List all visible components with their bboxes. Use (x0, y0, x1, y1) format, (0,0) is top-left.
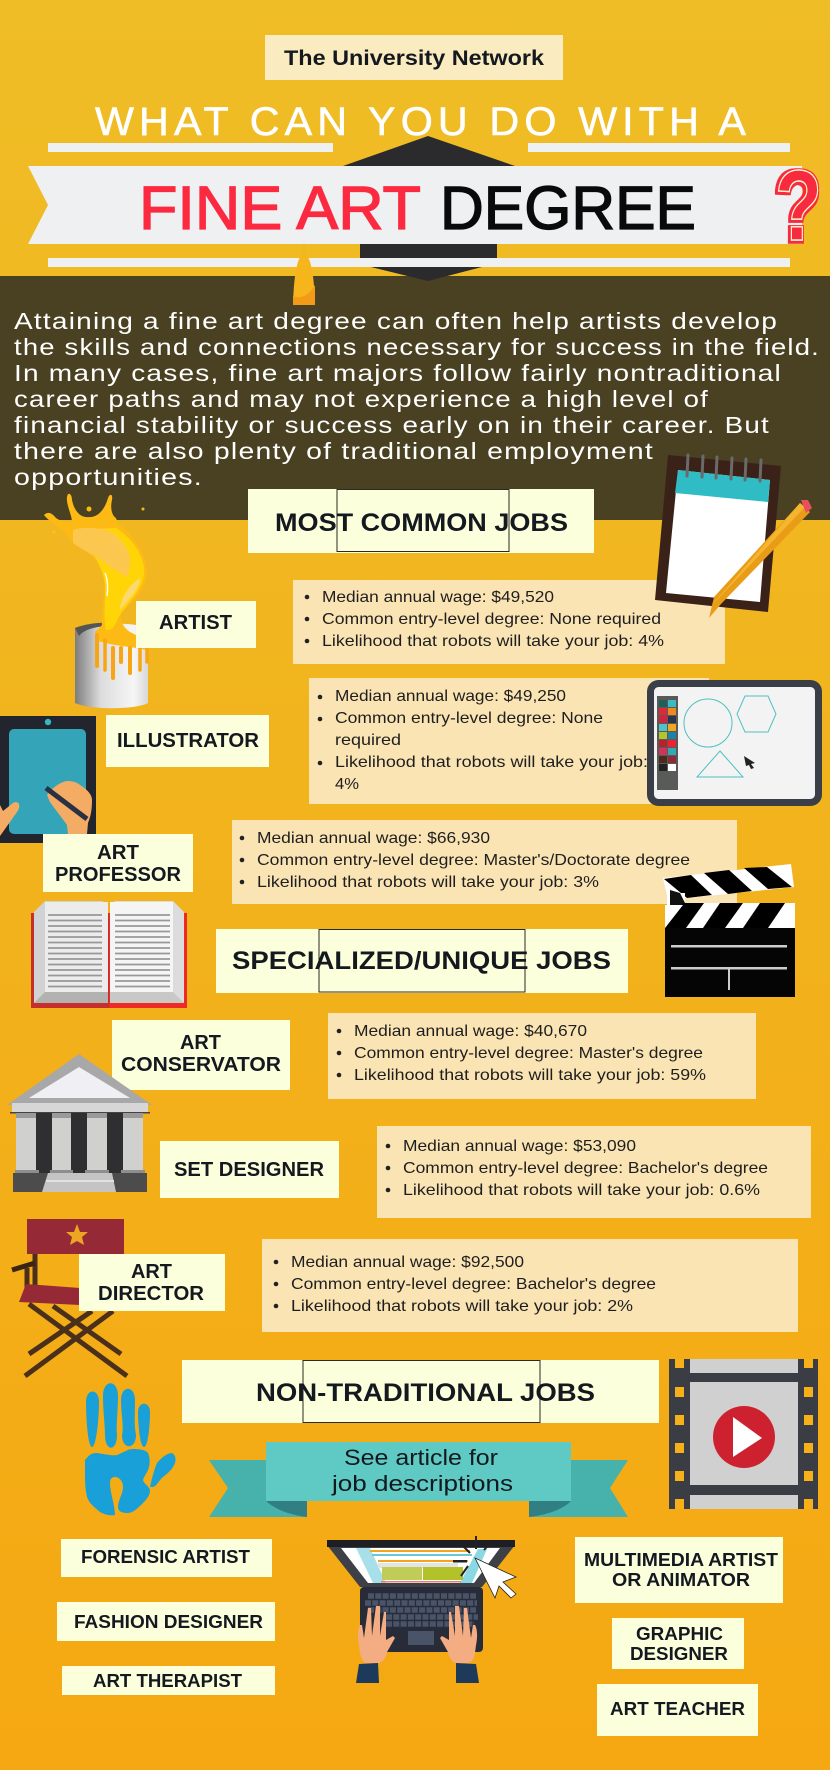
title line one: WHAT CAN YOU DO WITH A (95, 100, 751, 144)
label: multimedia artist or animator (575, 1537, 783, 1603)
label: artist: ARTIST (159, 612, 232, 634)
panel: art professor wages: Median annual wage: $66,930 (257, 830, 490, 847)
panel: illustrator wages: Likelihood that robots will take your job: (335, 754, 648, 771)
icon: whiteboard drawing tablet (650, 684, 818, 802)
icon: director's chair (12, 1219, 127, 1376)
label: set designer: SET DESIGNER (174, 1159, 325, 1181)
label: forensic artist (61, 1539, 272, 1577)
label: multimedia artist or animator: MULTIMEDIA ARTIST (584, 1550, 778, 1570)
label: art director (79, 1254, 225, 1311)
callout: see article ribbon: See article for (344, 1445, 498, 1470)
panel: art conservator wages: Common entry-level degree: Master's degree (354, 1045, 703, 1062)
heading: specialized jobs: SPECIALIZED/UNIQUE JOBS (232, 947, 611, 975)
publisher tag: The University Network (284, 47, 544, 70)
icon: blue hand print (85, 1383, 176, 1515)
panel: set designer wages: Likelihood that robots will take your job: 0.6% (403, 1182, 760, 1199)
label: fashion designer: FASHION DESIGNER (74, 1612, 263, 1632)
intro paragraph: there are also plenty of traditional employment (14, 438, 654, 464)
panel: art director wages (262, 1239, 798, 1332)
title line two: FINE ART (139, 174, 421, 242)
icon: museum building (7, 1054, 152, 1192)
panel: art director wages: Likelihood that robots will take your job: 2% (291, 1298, 633, 1315)
panel: illustrator wages: Common entry-level degree: None (335, 710, 603, 727)
intro paragraph: the skills and connections necessary for success in the field. (14, 334, 820, 360)
label: graphic designer (612, 1618, 744, 1669)
label: illustrator (106, 715, 269, 767)
label: set designer (160, 1141, 339, 1198)
panel: art conservator wages: Likelihood that robots will take your job: 59% (354, 1067, 706, 1084)
callout: see article ribbon: job descriptions (331, 1471, 513, 1496)
label: graphic designer: DESIGNER (630, 1644, 728, 1664)
panel: art director wages: Median annual wage: $92,500 (291, 1254, 524, 1271)
icon: film strip with play button (669, 1359, 818, 1509)
heading: non-traditional jobs: NON-TRADITIONAL JOBS (256, 1379, 595, 1407)
label: illustrator: ILLUSTRATOR (117, 730, 260, 752)
label: artist (136, 601, 256, 648)
icon: film clapperboard (663, 864, 795, 997)
icon: open book (31, 901, 187, 1008)
heading: most common jobs (248, 489, 594, 553)
title line two: DEGREE (440, 174, 696, 242)
panel: art professor wages: Likelihood that robots will take your job: 3% (257, 874, 599, 891)
label: art director: DIRECTOR (98, 1283, 205, 1305)
panel: art conservator wages (328, 1013, 756, 1099)
panel: illustrator wages: 4% (335, 776, 359, 793)
label: forensic artist: FORENSIC ARTIST (81, 1547, 250, 1567)
label: fashion designer (57, 1602, 275, 1641)
label: art conservator (112, 1020, 290, 1090)
label: art teacher: ART TEACHER (610, 1699, 745, 1719)
icon: graduation cap with title banner (28, 136, 802, 305)
label: art conservator: CONSERVATOR (121, 1054, 282, 1076)
label: art professor: PROFESSOR (55, 864, 182, 886)
title line two (139, 174, 696, 242)
panel: artist wages: Median annual wage: $49,520 (322, 589, 554, 606)
heading: specialized jobs (216, 929, 628, 993)
intro paragraph: opportunities. (14, 464, 203, 490)
heading: most common jobs: MOST COMMON JOBS (275, 509, 568, 537)
label: art professor: ART (97, 842, 139, 864)
panel: art director wages: Common entry-level degree: Bachelor's degree (291, 1276, 656, 1293)
publisher tag (265, 35, 563, 80)
panel: illustrator wages (309, 678, 709, 804)
panel: artist wages: Common entry-level degree: None required (322, 611, 661, 628)
panel: art conservator wages: Median annual wage: $40,670 (354, 1023, 587, 1040)
panel: set designer wages: Median annual wage: $53,090 (403, 1138, 636, 1155)
icon: paint can with splash (44, 494, 148, 708)
icon: notepad and pencil (655, 455, 812, 618)
label: art professor (43, 834, 193, 892)
intro paragraph: financial stability or success early on in their career. But (14, 412, 770, 438)
panel: artist wages: Likelihood that robots will take your job: 4% (322, 633, 664, 650)
panel: artist wages (293, 580, 725, 664)
label: graphic designer: GRAPHIC (636, 1624, 723, 1644)
label: art director: ART (131, 1261, 172, 1283)
label: art conservator: ART (180, 1032, 221, 1054)
label: art teacher (597, 1684, 758, 1736)
label: multimedia artist or animator: OR ANIMATOR (612, 1570, 750, 1590)
intro paragraph: Attaining a fine art degree can often help artists develop (14, 308, 778, 334)
icon: tablet with drawing hand (0, 716, 96, 843)
heading: non-traditional jobs (182, 1360, 659, 1423)
panel: set designer wages: Common entry-level degree: Bachelor's degree (403, 1160, 768, 1177)
label: art therapist (62, 1666, 275, 1695)
callout: see article ribbon (209, 1442, 628, 1517)
label: art therapist: ART THERAPIST (93, 1671, 242, 1691)
intro paragraph (14, 308, 820, 490)
intro paragraph: In many cases, fine art majors follow fairly nontraditional (14, 360, 782, 386)
intro paragraph: career paths and may not experience a high level of (14, 386, 709, 412)
panel: set designer wages (377, 1126, 811, 1218)
panel: illustrator wages: Median annual wage: $49,250 (335, 688, 566, 705)
intro band background (0, 276, 830, 520)
panel: art professor wages: Common entry-level degree: Master's/Doctorate degree (257, 852, 690, 869)
panel: illustrator wages: required (335, 732, 401, 749)
panel: art professor wages (232, 820, 737, 904)
icon: laptop with typing hands and cursor (327, 1536, 516, 1683)
